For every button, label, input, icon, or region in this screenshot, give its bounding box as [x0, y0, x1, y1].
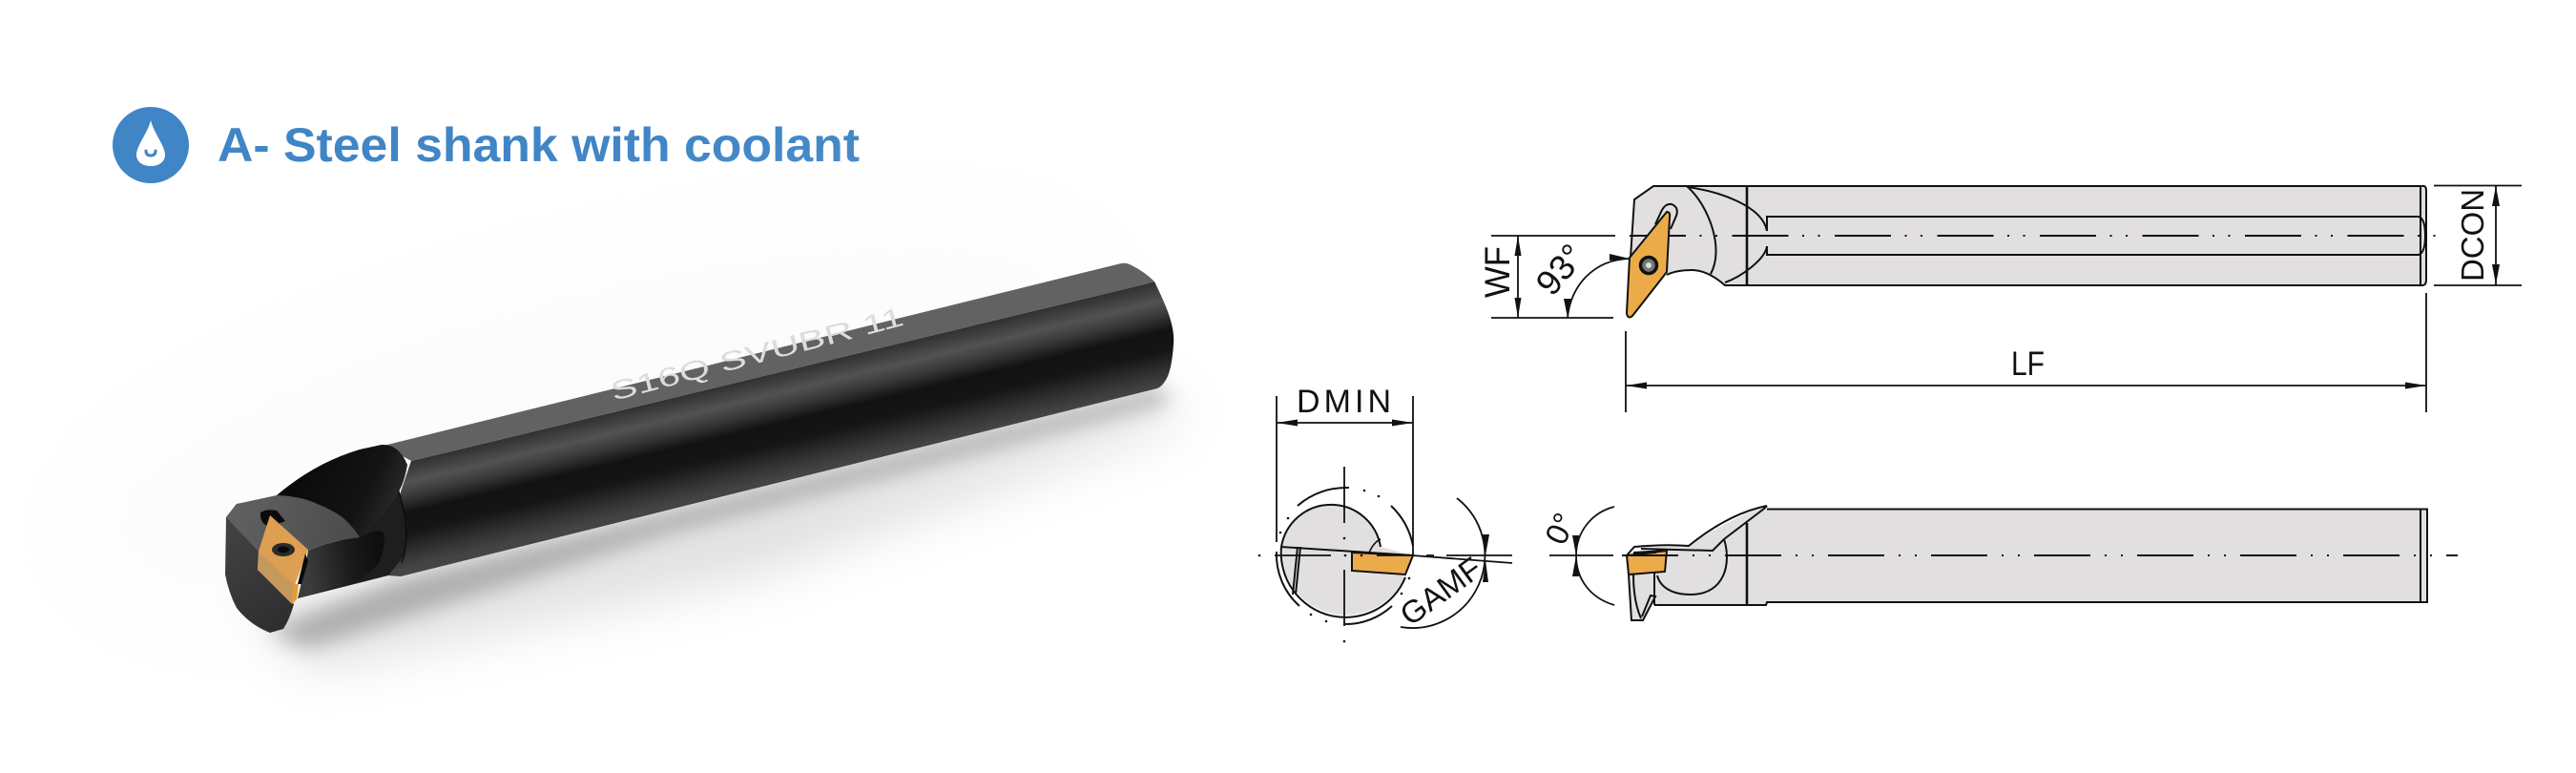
dimension LF — [1626, 293, 2426, 412]
shank flat face — [384, 263, 1154, 461]
section centre lines — [1275, 467, 1512, 626]
dimension LF: LF — [2011, 345, 2045, 383]
dimension WF — [1478, 236, 1615, 318]
dimension DCON — [2434, 185, 2522, 285]
drawing: top view of tool — [1478, 185, 2522, 412]
side body fill — [1629, 506, 2427, 620]
insert screw — [1641, 258, 1656, 273]
drawing: side view of tool — [1538, 506, 2458, 620]
side outlines — [1627, 506, 2427, 620]
dimension DCON: DCON — [2455, 189, 2490, 282]
dimension WF: WF — [1478, 246, 1517, 298]
centre line — [1630, 235, 2439, 237]
dimension DMIN — [1277, 384, 1413, 555]
section dots — [1258, 490, 1410, 642]
heading: coolant title — [113, 107, 860, 183]
dimension DMIN: DMIN — [1297, 384, 1391, 420]
product: boring bar render — [38, 152, 1183, 688]
shank cylinder — [387, 282, 1174, 576]
orange insert — [1627, 212, 1670, 317]
insert screw — [272, 543, 295, 556]
neck collar — [298, 489, 407, 598]
engraved model number: S16Q SVUBR 11 — [608, 302, 906, 407]
section insert — [1352, 553, 1413, 575]
side centre line — [1622, 554, 2458, 556]
drawing: end section view — [1258, 384, 1512, 642]
relief scoop — [277, 445, 407, 537]
dimension angle 93 degrees — [1528, 237, 1630, 318]
section outlines — [1277, 488, 1413, 624]
insert slot — [260, 510, 285, 527]
dimension angle 0 degrees: 0° — [1538, 508, 1583, 550]
tool body fill — [1631, 185, 2426, 285]
dimension GAMF — [1393, 498, 1489, 633]
side insert — [1627, 551, 1667, 575]
title text: A- Steel shank with coolant — [218, 118, 860, 172]
icon: water drop — [113, 107, 189, 183]
head top facet — [226, 495, 360, 552]
ground shadow — [38, 152, 1183, 688]
carbide insert — [258, 515, 308, 604]
dimension angle 0 degrees — [1538, 507, 1614, 605]
lower pocket — [298, 532, 384, 598]
dimension GAMF: GAMF — [1393, 550, 1488, 633]
head side face — [225, 504, 294, 633]
dimension angle 93 degrees: 93° — [1528, 237, 1592, 303]
section disc fill — [1281, 505, 1413, 615]
body outlines — [1631, 185, 2426, 285]
